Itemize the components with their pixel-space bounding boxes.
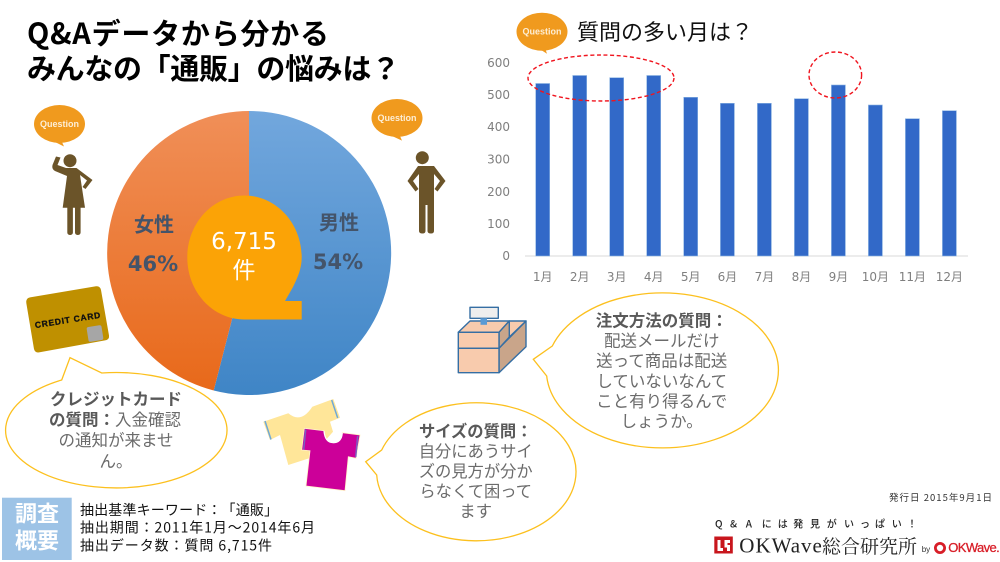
- callout: size question: ズの見方が分か: [419, 458, 533, 482]
- icon: question bubble female: [34, 105, 85, 146]
- label: male: 男性: [319, 206, 359, 236]
- icon: cash register: [458, 307, 526, 373]
- label: female: 女性: [134, 208, 174, 238]
- publication date: 発行日 2015年9月1日: [889, 490, 992, 504]
- callout: credit card question: ん。: [100, 448, 132, 472]
- center total text: [211, 229, 277, 285]
- logo: OKWave research institute: OKWave.: [948, 540, 1000, 555]
- callout: credit card question: の質問：入金確認: [49, 406, 182, 430]
- title: [27, 11, 400, 88]
- logo: OKWave research institute: by: [922, 545, 930, 554]
- x axis labels: 1月: [533, 270, 553, 284]
- callout: size question: サイズの質問：: [419, 418, 532, 442]
- center total bubble: [187, 196, 302, 320]
- title: みんなの「通販」の悩みは？: [27, 46, 400, 88]
- highlight: Sep: [809, 52, 862, 98]
- icon: man figure: [408, 151, 446, 234]
- x axis labels: 3月: [607, 270, 627, 284]
- y axis labels: 100: [487, 217, 510, 231]
- y axis labels: 500: [487, 88, 510, 102]
- magenta shirt: [302, 428, 360, 491]
- x axis labels: 11月: [899, 270, 926, 284]
- icon: t-shirts: [263, 399, 360, 491]
- survey summary label: 調査: [15, 497, 59, 529]
- x axis labels: 9月: [829, 270, 848, 284]
- icon: credit card: CREDIT CARD: [34, 310, 101, 330]
- callout: order method question: しょうか。: [621, 408, 703, 432]
- bars: [536, 76, 956, 256]
- survey summary text: 抽出期間：2011年1月～2014年6月: [80, 518, 315, 538]
- callout: size question: ます: [459, 498, 492, 522]
- y axis labels: 300: [487, 152, 510, 166]
- center total text: 6,715: [211, 229, 277, 255]
- center total text: 件: [232, 251, 256, 285]
- x axis labels: 5月: [681, 270, 701, 284]
- label: male: [313, 206, 363, 274]
- bar chart: questions by month: [487, 52, 968, 284]
- y axis labels: 0: [502, 249, 510, 263]
- x axis labels: 4月: [644, 270, 664, 284]
- callout: order method question: [533, 293, 778, 448]
- callout: order method question: 送って商品は配送: [596, 348, 727, 372]
- x axis labels: 7月: [755, 270, 774, 284]
- y axis labels: 600: [487, 56, 510, 70]
- x axis labels: [533, 270, 963, 284]
- logo: OKWave research institute: 総合研究所: [822, 532, 917, 559]
- tagline: Q&Aには発見がいっぱい！: [715, 516, 917, 530]
- callout: size question: [366, 403, 576, 541]
- icon: question bubble chart: Question: [522, 27, 562, 37]
- logo: OKWave research institute: OKWave: [739, 534, 822, 558]
- x axis labels: 6月: [718, 270, 737, 284]
- pie chart: gender split: [107, 111, 391, 395]
- x axis labels: 12月: [936, 270, 963, 284]
- icon: woman figure: [52, 154, 92, 235]
- title: Q&Aデータから分かる: [27, 11, 329, 53]
- x axis labels: 10月: [862, 270, 889, 284]
- icon: question bubble male: [372, 99, 422, 141]
- survey summary text: [80, 500, 315, 555]
- pie slice: male 54%: [214, 111, 391, 395]
- callout: order method question: こと有り得るんで: [596, 388, 727, 412]
- highlight: Jan-Apr: [528, 55, 674, 101]
- callout: credit card question: の通知が来ませ: [58, 427, 174, 451]
- logo: OKWave research institute: [714, 532, 1000, 559]
- callout: credit card question: [6, 358, 227, 488]
- y axis labels: 200: [487, 185, 510, 199]
- yellow shirt: [263, 399, 340, 465]
- callout: order method question: 配送メールだけ: [604, 328, 719, 352]
- callout: order method question: 注文方法の質問：: [596, 308, 728, 332]
- survey summary text: 抽出データ数：質問 6,715件: [80, 535, 272, 555]
- label: male: 54%: [313, 250, 363, 274]
- callout: size question: らなくて困って: [419, 478, 532, 502]
- chart heading: 質問の多い月は？: [577, 15, 753, 47]
- survey summary label: 概要: [15, 523, 59, 555]
- y axis labels: [487, 56, 510, 263]
- icon: question bubble female: Question: [40, 119, 79, 129]
- label: female: [128, 208, 178, 276]
- survey summary label: [2, 497, 72, 560]
- callout: size question: 自分にあうサイ: [419, 438, 533, 462]
- callout: order method question: していないなんて: [596, 368, 727, 392]
- icon: question bubble male: Question: [377, 113, 417, 123]
- icon: question bubble chart: [516, 13, 568, 54]
- callout: credit card question: クレジットカード: [50, 386, 182, 410]
- y axis labels: 400: [487, 120, 510, 134]
- label: female: 46%: [128, 252, 178, 276]
- pie slice: female 46%: [107, 111, 249, 390]
- x axis labels: 8月: [792, 270, 811, 284]
- x axis labels: 2月: [570, 270, 590, 284]
- survey summary text: 抽出基準キーワード：「通販」: [80, 500, 278, 520]
- icon: credit card: [26, 286, 109, 352]
